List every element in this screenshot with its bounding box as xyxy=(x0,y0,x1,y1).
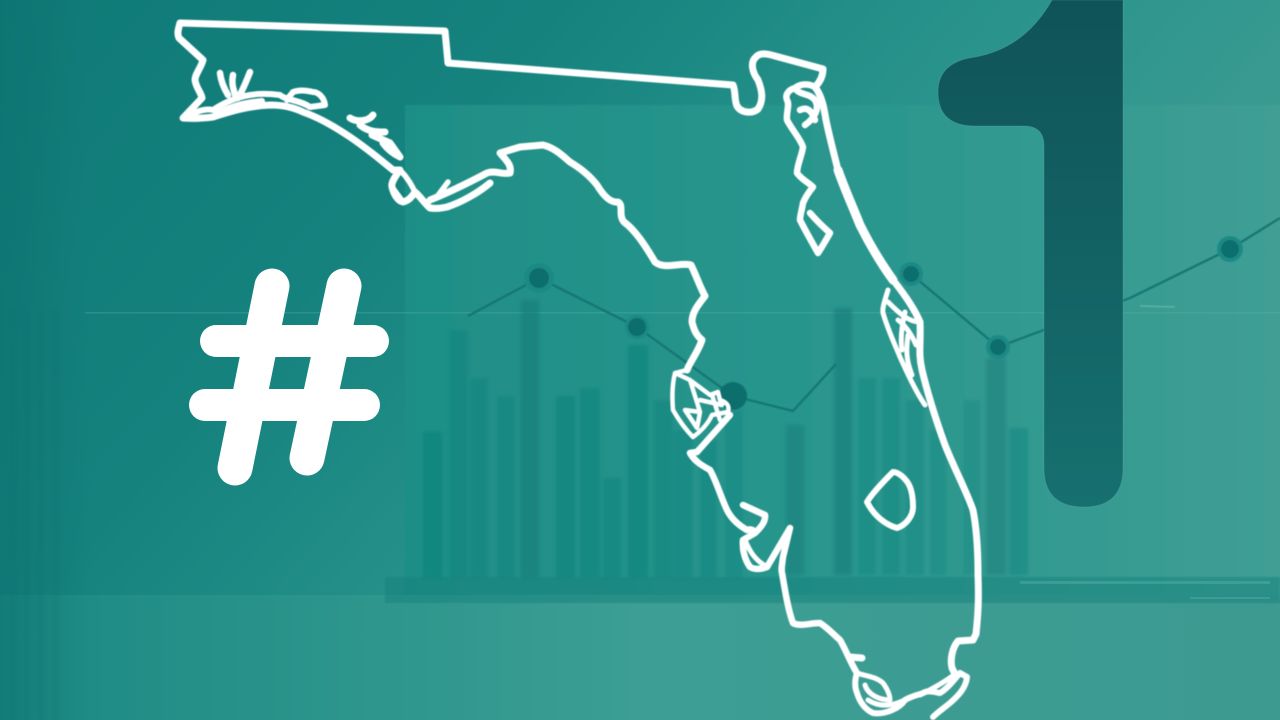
Lake Okeechobee xyxy=(867,472,913,528)
St Johns river xyxy=(786,84,830,253)
big numeral 1 xyxy=(938,0,1123,507)
icon: hash symbol xyxy=(205,286,373,468)
line chart xyxy=(468,218,1280,411)
gulf coast xyxy=(178,23,490,208)
Florida state outline xyxy=(178,23,978,717)
Tampa Bay xyxy=(672,370,729,437)
panhandle north border xyxy=(180,23,823,112)
east coast xyxy=(815,87,978,674)
south tip and keys xyxy=(850,657,862,658)
bar chart xyxy=(423,300,1028,578)
panhandle bays xyxy=(183,90,325,118)
thick east coast overlay xyxy=(838,170,893,280)
Indian River lagoon xyxy=(883,290,925,405)
